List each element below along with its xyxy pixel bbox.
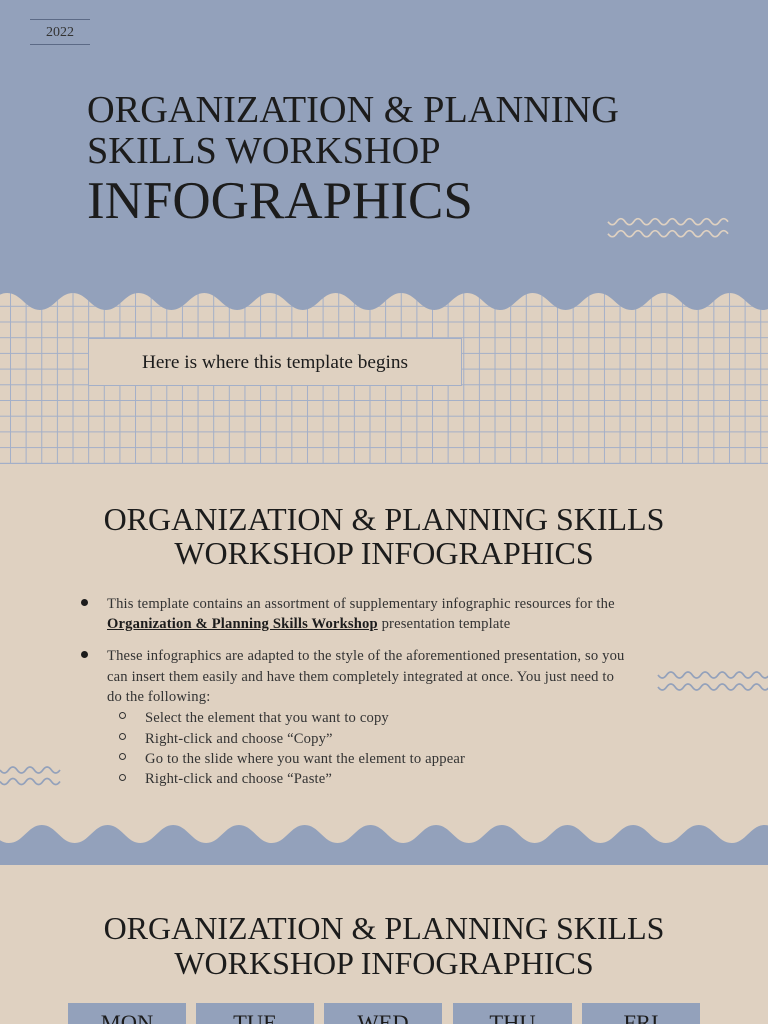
heading: section one: WORKSHOP INFOGRAPHICS xyxy=(174,535,594,571)
year tag xyxy=(30,19,90,45)
heading: section one xyxy=(104,501,664,571)
title xyxy=(87,89,619,230)
title: SKILLS WORKSHOP xyxy=(87,130,441,172)
wavy divider band xyxy=(0,825,768,865)
bullet list: Right-click and choose “Copy” xyxy=(145,731,333,747)
bullet list: This template contains an assortment of supplementary infographic resources for the xyxy=(107,596,615,612)
decorative squiggle: left xyxy=(0,766,60,786)
callout: template begins xyxy=(88,338,462,386)
weekday header row xyxy=(68,1003,700,1024)
decorative squiggle: right xyxy=(658,671,768,691)
bullet list: do the following: xyxy=(107,689,210,705)
heading: section two: WORKSHOP INFOGRAPHICS xyxy=(174,945,594,981)
bullet list: Go to the slide where you want the element to appear xyxy=(145,751,465,767)
bullet list: can insert them easily and have them completely integrated at once. You just need to xyxy=(107,669,614,685)
year tag: 2022 xyxy=(46,25,74,40)
decorative squiggle: top right xyxy=(607,218,728,238)
callout: template begins: Here is where this template begins xyxy=(142,352,408,373)
title: ORGANIZATION & PLANNING xyxy=(87,89,619,131)
bullet list xyxy=(81,596,625,787)
title: INFOGRAPHICS xyxy=(87,172,473,230)
heading: section two xyxy=(104,910,664,981)
bullet list: Select the element that you want to copy xyxy=(145,710,389,726)
bullet list: These infographics are adapted to the style of the aforementioned presentation, so you xyxy=(107,648,625,664)
heading: section one: ORGANIZATION & PLANNING SKILLS xyxy=(104,501,664,537)
bullet list: Right-click and choose “Paste” xyxy=(145,771,332,787)
bullet list: Organization & Planning Skills Workshop presentation template xyxy=(107,616,510,632)
heading: section two: ORGANIZATION & PLANNING SKILLS xyxy=(104,910,664,946)
panel: header band with grid and wavy edge xyxy=(0,0,768,464)
